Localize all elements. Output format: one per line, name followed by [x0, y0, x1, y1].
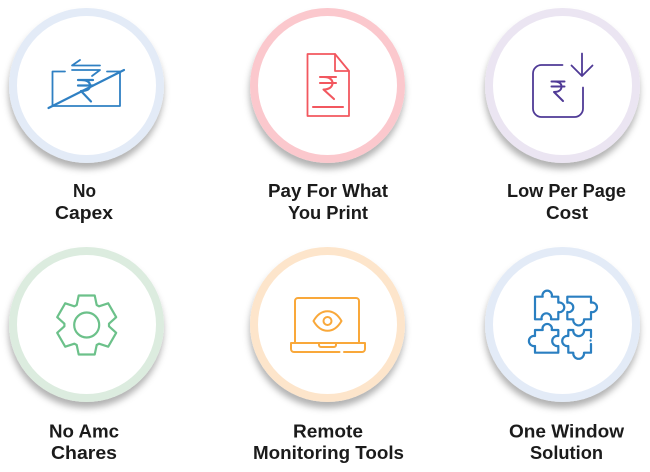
icon: rupee with down arrow — [533, 54, 592, 117]
label: One Window Solution: Solution — [530, 442, 603, 463]
label: Pay For What You Print: Pay For What — [268, 180, 388, 201]
label: No Capex: No — [73, 180, 96, 201]
panel: Remote Monitoring Tools — [253, 251, 404, 463]
ring: green — [13, 251, 160, 398]
icon: laptop with eye — [291, 298, 365, 352]
label: No Amc Chares: Chares — [51, 442, 117, 463]
ring: lavender — [489, 12, 636, 159]
label: No Amc Chares — [49, 420, 119, 463]
label: One Window Solution: One Window — [509, 420, 625, 442]
label: Low Per Page Cost — [507, 180, 626, 223]
panel: No Capex — [13, 12, 160, 223]
label: Low Per Page Cost: Cost — [546, 202, 588, 223]
icon: gear — [57, 296, 116, 354]
icon: puzzle pieces — [529, 291, 597, 359]
label: One Window Solution — [509, 420, 625, 463]
panel: Low Per Page Cost — [489, 12, 636, 223]
label: Remote Monitoring Tools: Monitoring Tools — [253, 442, 404, 463]
icon: no capex crossed rupee — [48, 60, 124, 108]
panel: No AMC Charges — [13, 251, 160, 463]
label: Pay For What You Print: You Print — [288, 202, 368, 223]
label: No Amc Chares: No Amc — [49, 420, 119, 442]
label: No Capex — [55, 180, 114, 223]
label: Remote Monitoring Tools — [253, 420, 404, 463]
ring: peach — [254, 251, 401, 398]
ring: blue — [489, 251, 636, 398]
icon: rupee invoice — [308, 54, 349, 116]
label: Remote Monitoring Tools: Remote — [293, 420, 363, 442]
ring: blue — [13, 12, 160, 159]
panel: Pay For What You Print — [254, 12, 401, 223]
label: Pay For What You Print — [268, 180, 388, 223]
label: Low Per Page Cost: Low Per Page — [507, 180, 626, 201]
label: No Capex: Capex — [55, 202, 114, 223]
ring: pink — [254, 12, 401, 159]
panel: One Window Solution — [489, 251, 636, 463]
